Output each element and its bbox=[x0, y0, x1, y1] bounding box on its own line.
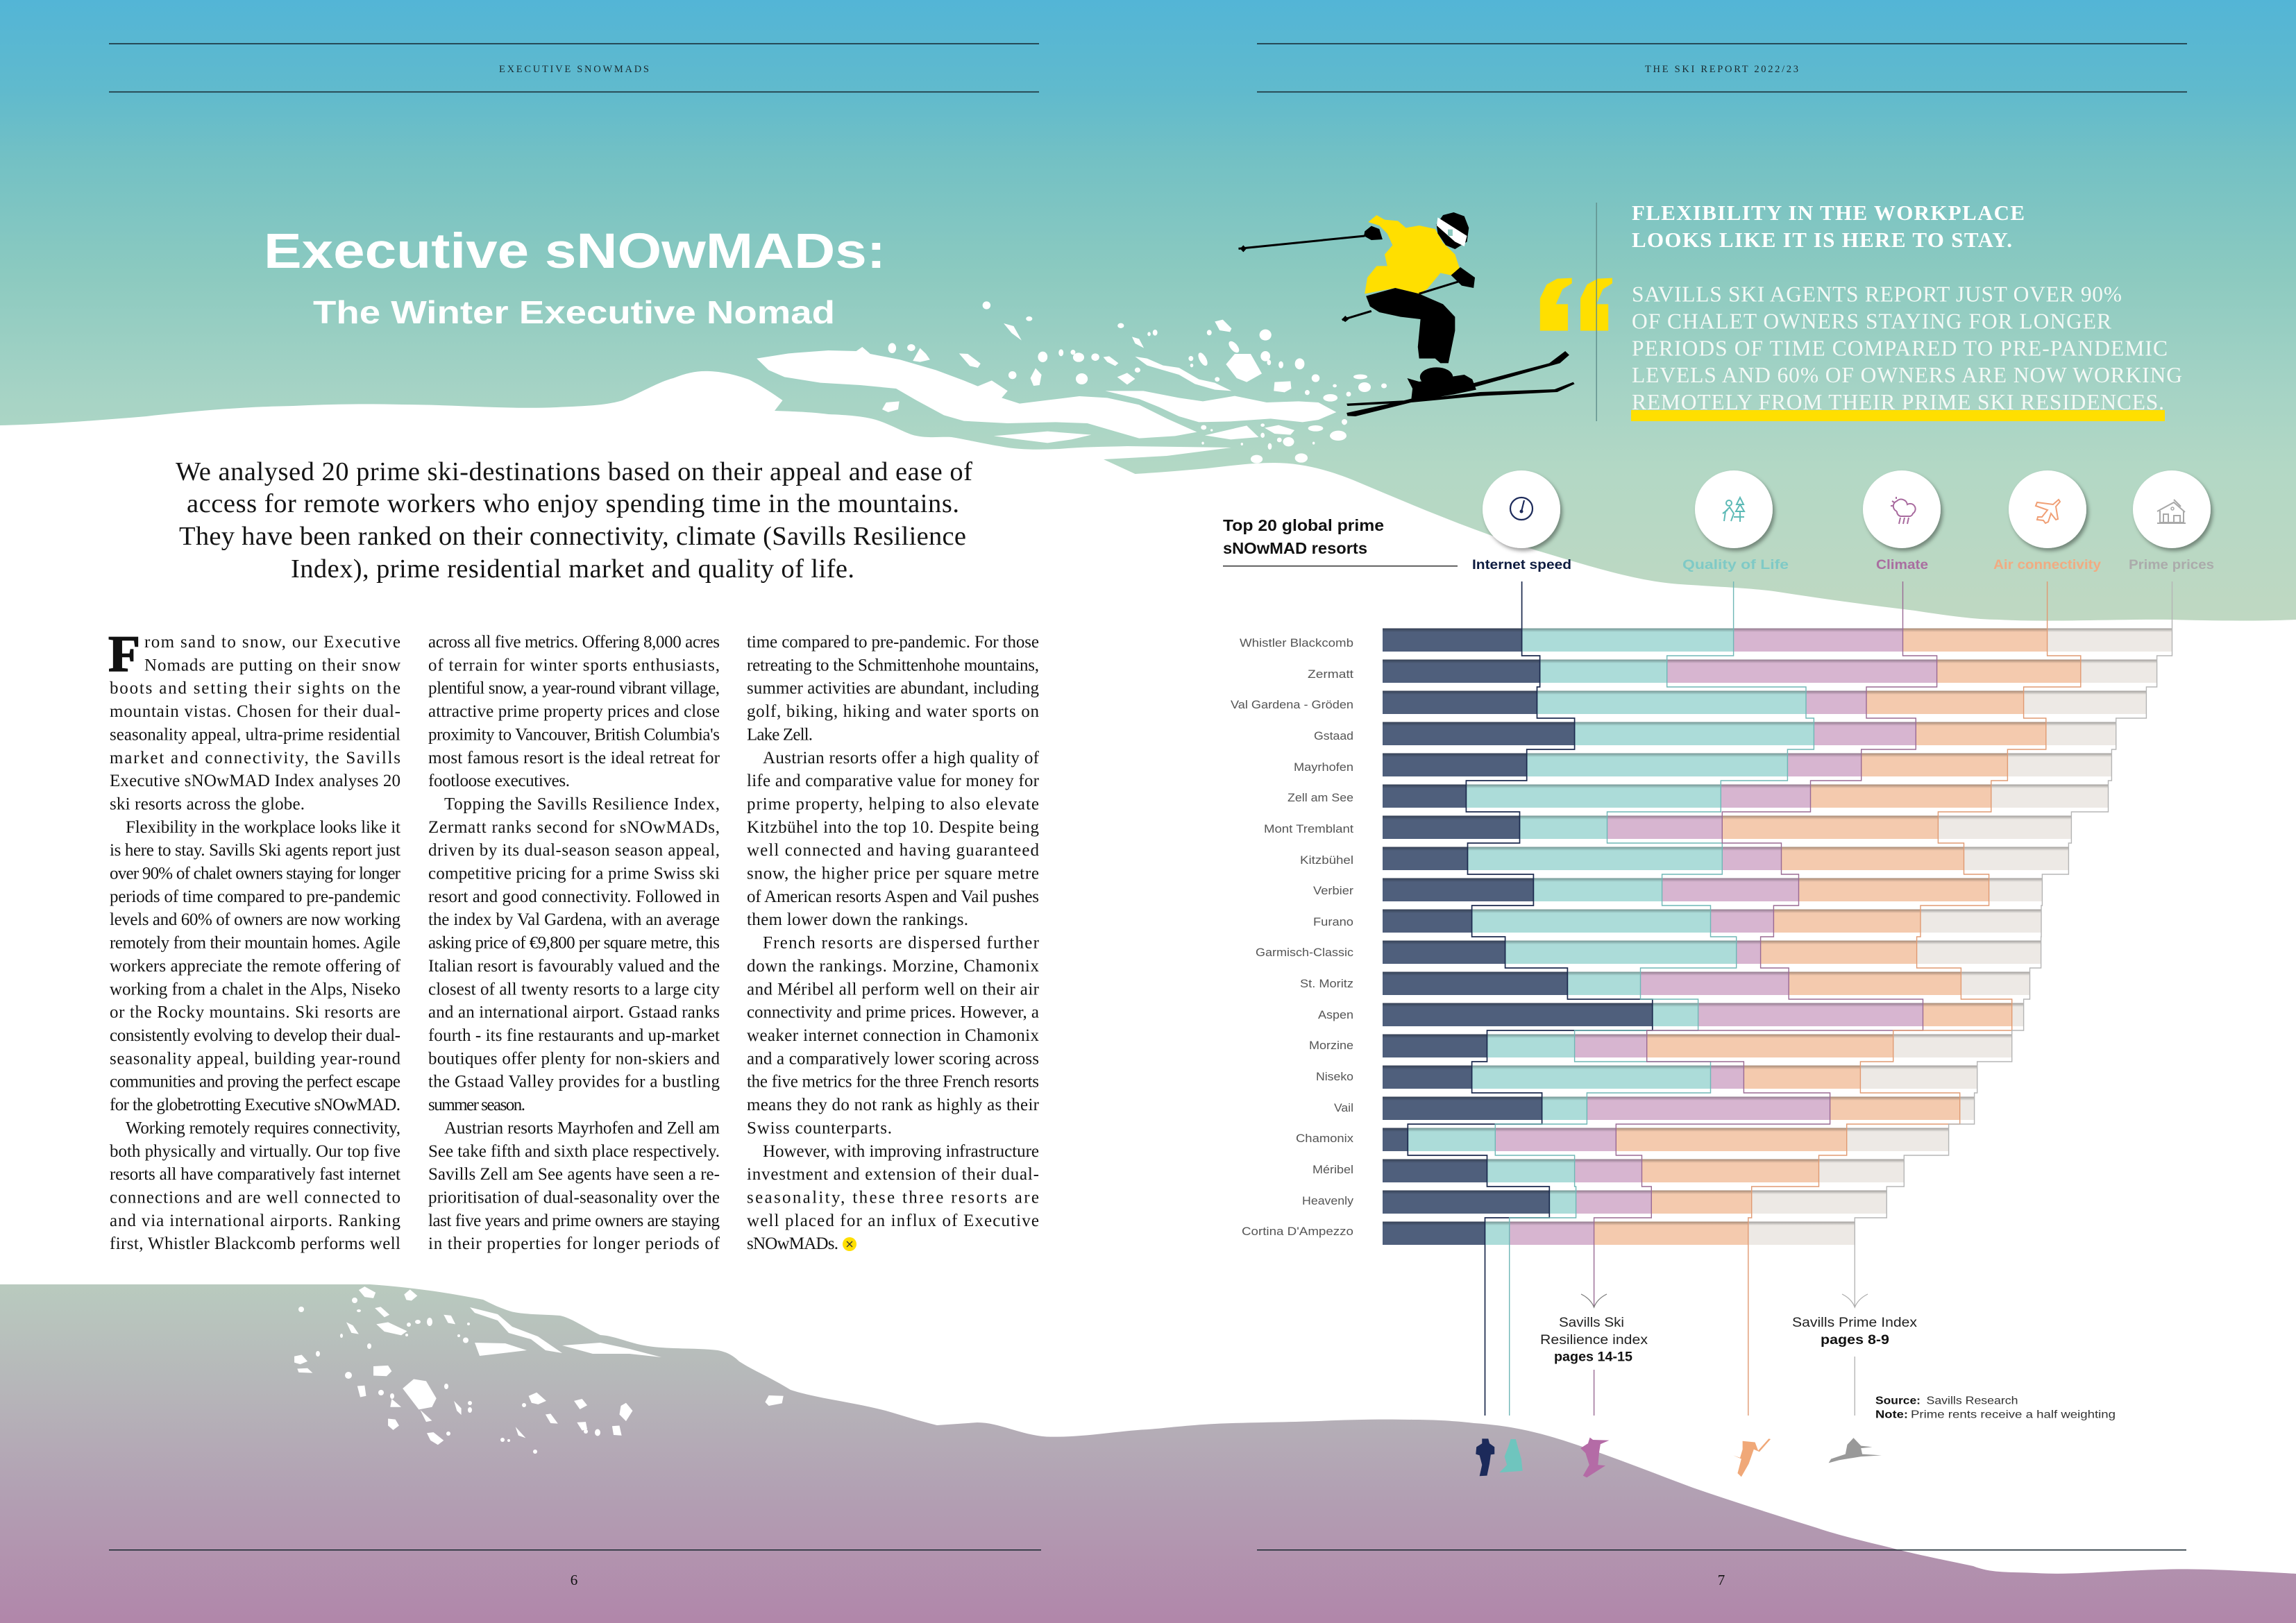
body text column 3: time compared to pre-pandemic. For those bbox=[747, 633, 1039, 652]
body text column 2: competitive pricing for a prime Swiss ski bbox=[428, 865, 720, 883]
body text column 2: last five years and prime owners are staying bbox=[428, 1212, 720, 1230]
body text column 2: and an international airport. Gstaad ranks bbox=[428, 1003, 720, 1022]
gloves bbox=[1364, 226, 1475, 288]
row: Chamonix: Chamonix bbox=[1296, 1132, 1354, 1145]
skis bbox=[1347, 351, 1575, 416]
body text column 1: communities and proving the perfect escape bbox=[110, 1073, 400, 1091]
snow spray streaks top bbox=[757, 301, 1351, 464]
icon: teal skier bbox=[1499, 1439, 1523, 1472]
body text column 2: boutiques offer plenty for non-skiers and bbox=[428, 1049, 720, 1068]
row: Aspen: Aspen bbox=[1318, 1008, 1353, 1021]
note: Savills Prime Index: pages 8-9 bbox=[1821, 1333, 1889, 1348]
row: Val Gardena - Gröden: Val Gardena - Gröden bbox=[1231, 698, 1353, 711]
icon: navy skier bbox=[1476, 1438, 1494, 1476]
body text column 1: Executive sNOwMAD Index analyses 20 bbox=[110, 772, 400, 790]
quote body: LEVELS AND 60% OF OWNERS ARE NOW WORKING bbox=[1632, 363, 2182, 387]
body text column 1: working from a chalet in the Alps, Niseko bbox=[110, 980, 400, 999]
body text column 2: See take fifth and sixth place respectively. bbox=[428, 1142, 720, 1161]
body text column 2: attractive prime property prices and close bbox=[428, 702, 720, 721]
note: Savills Ski Resilience index: pages 14-15 bbox=[1554, 1350, 1632, 1364]
source note bbox=[1875, 1395, 2116, 1421]
body text column 1: workers appreciate the remote offering of bbox=[110, 957, 401, 976]
note: Savills Prime Index bbox=[1792, 1316, 1918, 1348]
stepped line: quality of life bbox=[1495, 581, 1814, 1416]
white snow field bbox=[0, 371, 2296, 1574]
body text column 1: remotely from their mountain homes. Agile bbox=[110, 934, 400, 953]
quote divider bbox=[1596, 203, 1597, 421]
quote heading: LOOKS LIKE IT IS HERE TO STAY. bbox=[1632, 228, 2012, 252]
body text column 3: of American resorts Aspen and Vail pushes bbox=[747, 887, 1039, 906]
row: Kitzbühel bbox=[1300, 847, 2068, 870]
helmet bbox=[1437, 212, 1469, 249]
body text column 3: the five metrics for the three French resorts bbox=[747, 1073, 1039, 1091]
body text column 3: life and comparative value for money for bbox=[747, 772, 1040, 790]
intro paragraph: access for remote workers who enjoy spending time in the mountains. bbox=[187, 489, 959, 518]
row: St. Moritz bbox=[1300, 971, 2029, 995]
body text column 3: However, with improving infrastructure bbox=[763, 1142, 1039, 1161]
row: Zell am See bbox=[1288, 784, 2109, 808]
footer left: 6 bbox=[571, 1572, 577, 1588]
metric: internet speed: Internet speed bbox=[1472, 558, 1571, 572]
quote marks bbox=[1540, 278, 1612, 331]
metric: prime prices bbox=[2129, 470, 2214, 572]
body text column 3: snow, the higher price per square metre bbox=[747, 865, 1039, 883]
row: Morzine bbox=[1309, 1034, 2012, 1057]
row: Mont Tremblant bbox=[1264, 816, 2071, 839]
row: Whistler Blackcomb bbox=[1240, 629, 2172, 652]
body text column 1: Nomads are putting on their snow bbox=[144, 656, 400, 674]
row: Méribel: Méribel bbox=[1312, 1163, 1353, 1176]
body text column 1: market and connectivity, the Savills bbox=[110, 749, 400, 767]
body text column 1: over 90% of chalet owners staying for longer bbox=[110, 865, 401, 883]
row: Méribel bbox=[1312, 1159, 1904, 1182]
body text column 1: for the globetrotting Executive sNOwMAD. bbox=[110, 1096, 400, 1114]
body text column 1: ski resorts across the globe. bbox=[110, 795, 305, 813]
body text column 1: connections and are well connected to bbox=[110, 1188, 400, 1207]
metric: prime prices: Prime prices bbox=[2129, 558, 2214, 572]
body text column 2: prioritisation of dual-seasonality over the bbox=[428, 1188, 720, 1207]
stepped line: air connectivity bbox=[1748, 581, 2081, 1416]
body text column 3: prime property, helping to also elevate bbox=[747, 795, 1039, 813]
note: Savills Ski Resilience index: Resilience index bbox=[1540, 1333, 1648, 1348]
row: Niseko: Niseko bbox=[1316, 1070, 1353, 1083]
chart heading bbox=[1223, 516, 1458, 566]
body text column 3: connectivity and prime prices. However, a bbox=[747, 1003, 1039, 1022]
body text column 2: in their properties for longer periods of bbox=[428, 1234, 720, 1253]
body text column 1: or the Rocky mountains. Ski resorts are bbox=[110, 1003, 400, 1022]
body text column 1 bbox=[110, 633, 401, 1253]
row: Niseko bbox=[1316, 1066, 1977, 1089]
body text column 3: and a comparatively lower scoring across bbox=[747, 1049, 1039, 1068]
icon: orange skier bbox=[1733, 1438, 1771, 1477]
body text column 3: down the rankings. Morzine, Chamonix bbox=[747, 957, 1040, 976]
source note: Prime rents receive a half weighting bbox=[1911, 1409, 2116, 1421]
source note: Savills Research bbox=[1927, 1395, 2018, 1407]
quote body bbox=[1632, 282, 2182, 414]
body text column 2: the Gstaad Valley provides for a bustling bbox=[428, 1073, 720, 1091]
metric: climate: Climate bbox=[1876, 558, 1928, 572]
row: Verbier bbox=[1313, 878, 2042, 901]
row: Whistler Blackcomb: Whistler Blackcomb bbox=[1240, 636, 1353, 649]
body text column 3: retreating to the Schmittenhohe mountains, bbox=[747, 656, 1039, 674]
body text column 3: Austrian resorts offer a high quality of bbox=[763, 749, 1040, 767]
body text column 1: Flexibility in the workplace looks like it bbox=[126, 818, 400, 837]
body text column 2: most famous resort is the ideal retreat for bbox=[428, 749, 720, 767]
chart heading: Top 20 global prime bbox=[1223, 516, 1384, 534]
header right bbox=[1257, 44, 2187, 92]
row: Chamonix bbox=[1296, 1128, 1949, 1151]
body text column 2: Savills Zell am See agents have seen a re- bbox=[428, 1165, 720, 1184]
row: Cortina D'Ampezzo bbox=[1242, 1221, 1855, 1245]
body text column 3: Kitzbühel into the top 10. Despite being bbox=[747, 818, 1040, 837]
row: Zermatt: Zermatt bbox=[1308, 668, 1353, 681]
intro paragraph bbox=[176, 457, 972, 584]
quote highlight bar bbox=[1631, 410, 2165, 421]
basket marks bbox=[1240, 245, 1349, 322]
body text column 2: the index by Val Gardena, with an average bbox=[428, 910, 720, 929]
body text column 2: Topping the Savills Resilience Index, bbox=[444, 795, 720, 813]
body text column 1: Working remotely requires connectivity, bbox=[126, 1119, 400, 1137]
body text column 3 bbox=[747, 633, 1040, 1253]
icon: grey skier bbox=[1829, 1438, 1882, 1463]
body text column 1: rom sand to snow, our Executive bbox=[144, 633, 400, 652]
body text column 2: Zermatt ranks second for sNOwMADs, bbox=[428, 818, 720, 837]
body text column 2: driven by its dual-season season appeal, bbox=[428, 841, 720, 860]
body text column 2 bbox=[428, 633, 720, 1253]
body text column 3: weaker internet connection in Chamonix bbox=[747, 1026, 1040, 1045]
row: Kitzbühel: Kitzbühel bbox=[1300, 853, 1353, 867]
row: Vail: Vail bbox=[1334, 1101, 1353, 1114]
body text column 3: investment and extension of their dual- bbox=[747, 1165, 1039, 1184]
body text column 3: them lower down the rankings. bbox=[747, 910, 968, 929]
metric: air connectivity: Air connectivity bbox=[1993, 558, 2101, 572]
poles bbox=[1238, 236, 1460, 320]
metric: air connectivity bbox=[1993, 470, 2101, 572]
row: Garmisch-Classic bbox=[1256, 941, 2041, 964]
row: Furano: Furano bbox=[1313, 915, 1353, 928]
body text column 3: and Méribel all perform well on their air bbox=[747, 980, 1040, 999]
footer right: 7 bbox=[1718, 1572, 1725, 1588]
boots bbox=[1420, 367, 1453, 386]
body text column 1: consistently evolving to develop their dual- bbox=[110, 1026, 400, 1045]
body text column 1: is here to stay. Savills Ski agents report just bbox=[110, 841, 400, 860]
header right: THE SKI REPORT 2022/23 bbox=[1645, 64, 1798, 75]
body text column 2: footloose executives. bbox=[428, 772, 570, 790]
body text column 2: fourth - its fine restaurants and up-market bbox=[428, 1026, 720, 1045]
icon: purple skier bbox=[1580, 1438, 1609, 1477]
row: Mont Tremblant: Mont Tremblant bbox=[1264, 822, 1353, 835]
metric: climate bbox=[1863, 470, 1941, 572]
drop cap: F bbox=[108, 626, 140, 683]
row: Mayrhofen bbox=[1294, 754, 2111, 776]
row: Garmisch-Classic: Garmisch-Classic bbox=[1256, 946, 1354, 959]
body text column 1: first, Whistler Blackcomb performs well bbox=[110, 1234, 400, 1253]
small skier figures bbox=[1476, 1438, 1882, 1477]
note: Savills Ski Resilience index: Savills Ski bbox=[1559, 1316, 1624, 1330]
body text column 3: golf, biking, hiking and water sports on bbox=[747, 702, 1040, 721]
title: Executive sNOwMADs: bbox=[264, 224, 886, 279]
body text column 2: closest of all twenty resorts to a large city bbox=[428, 980, 720, 999]
body text column 2: summer season. bbox=[428, 1096, 525, 1114]
row: Verbier: Verbier bbox=[1313, 884, 1353, 897]
arrow: resilience index bbox=[1581, 1294, 1607, 1307]
quote body: REMOTELY FROM THEIR PRIME SKI RESIDENCES. bbox=[1632, 390, 2164, 414]
quote heading bbox=[1632, 201, 2025, 252]
row: Cortina D'Ampezzo: Cortina D'Ampezzo bbox=[1242, 1225, 1353, 1238]
arrow: prime index bbox=[1842, 1294, 1868, 1307]
body text column 2: Italian resort is favourably valued and the bbox=[428, 957, 720, 976]
snow spray near skier bbox=[1330, 375, 1387, 441]
metric: quality of life: Quality of Life bbox=[1682, 558, 1789, 572]
row: Morzine: Morzine bbox=[1309, 1039, 1353, 1052]
body text column 2: asking price of €9,800 per square metre, this bbox=[428, 934, 720, 953]
body text column 3: means they do not rank as highly as their bbox=[747, 1096, 1040, 1114]
row: Aspen bbox=[1318, 1003, 2024, 1026]
row: Val Gardena - Gröden bbox=[1231, 691, 2146, 714]
row: Zermatt bbox=[1308, 659, 2157, 683]
header left bbox=[109, 44, 1039, 92]
quote body: OF CHALET OWNERS STAYING FOR LONGER bbox=[1632, 309, 2111, 333]
body text column 3: French resorts are dispersed further bbox=[763, 934, 1040, 953]
body text column 2: Austrian resorts Mayrhofen and Zell am bbox=[444, 1119, 720, 1137]
body text column 1: and via international airports. Ranking bbox=[110, 1212, 401, 1230]
quote body: SAVILLS SKI AGENTS REPORT JUST OVER 90% bbox=[1632, 282, 2122, 307]
stepped line: climate bbox=[1594, 581, 1937, 1416]
row: Zell am See: Zell am See bbox=[1288, 791, 1353, 804]
goggles bbox=[1437, 217, 1467, 246]
body text column 3: well placed for an influx of Executive bbox=[747, 1212, 1039, 1230]
body text column 2: of terrain for winter sports enthusiasts, bbox=[428, 656, 720, 674]
intro paragraph: Index), prime residential market and quality of life. bbox=[291, 554, 854, 584]
body text column 3: well connected and having guaranteed bbox=[747, 841, 1040, 860]
quote heading: FLEXIBILITY IN THE WORKPLACE bbox=[1632, 201, 2025, 225]
subtitle: The Winter Executive Nomad bbox=[313, 294, 835, 330]
body text column 2: across all five metrics. Offering 8,000 acres bbox=[428, 633, 720, 652]
body text column 1: mountain vistas. Chosen for their dual- bbox=[110, 702, 400, 721]
row: Gstaad bbox=[1314, 722, 2116, 745]
row: Gstaad: Gstaad bbox=[1314, 729, 1353, 742]
trousers bbox=[1366, 288, 1455, 368]
body text column 2: resort and good connectivity. Followed in bbox=[428, 887, 720, 906]
header left: EXECUTIVE SNOWMADS bbox=[499, 64, 649, 75]
body text column 2: proximity to Vancouver, British Columbia's bbox=[428, 725, 720, 744]
row: Furano bbox=[1313, 909, 2041, 933]
source note: Note: bbox=[1875, 1409, 1908, 1421]
row: Vail bbox=[1334, 1096, 1975, 1120]
snow spray bottom left bbox=[294, 1286, 784, 1454]
row: Heavenly: Heavenly bbox=[1302, 1194, 1354, 1207]
stacked bar chart bbox=[1231, 629, 2172, 1245]
icon: end mark bbox=[843, 1237, 856, 1251]
body text column 1: seasonality appeal, building year-round bbox=[110, 1049, 401, 1068]
body text column 3: Lake Zell. bbox=[747, 725, 813, 744]
metric: internet speed bbox=[1472, 470, 1571, 572]
body text column 1: both physically and virtually. Our top five bbox=[110, 1142, 400, 1161]
skier illustration bbox=[1238, 212, 1575, 416]
goggle lens bbox=[1448, 230, 1453, 236]
body text column 3: seasonality, these three resorts are bbox=[747, 1188, 1039, 1207]
body text column 3: sNOwMADs. bbox=[747, 1234, 838, 1253]
body text column 1: periods of time compared to pre-pandemic bbox=[110, 887, 400, 906]
body text column 1: levels and 60% of owners are now working bbox=[110, 910, 401, 929]
body text column 2: plentiful snow, a year-round vibrant village, bbox=[428, 679, 720, 698]
stepped line: prime prices bbox=[1855, 581, 2172, 1416]
stepped line: internet speed bbox=[1408, 581, 1653, 1416]
row: Mayrhofen: Mayrhofen bbox=[1294, 760, 1353, 774]
row: Heavenly bbox=[1302, 1191, 1886, 1214]
jacket bbox=[1365, 215, 1460, 294]
metric: quality of life bbox=[1682, 470, 1789, 572]
intro paragraph: They have been ranked on their connectivity, climate (Savills Resilience bbox=[179, 522, 966, 551]
intro paragraph: We analysed 20 prime ski-destinations based on their appeal and ease of bbox=[176, 457, 972, 486]
source note: Source: bbox=[1875, 1395, 1921, 1407]
body text column 3: Swiss counterparts. bbox=[747, 1119, 892, 1137]
chart heading: sNOwMAD resorts bbox=[1223, 539, 1367, 557]
quote body: PERIODS OF TIME COMPARED TO PRE-PANDEMIC bbox=[1632, 336, 2168, 361]
note: Savills Ski Resilience index bbox=[1540, 1316, 1648, 1364]
body text column 1: boots and setting their sights on the bbox=[110, 679, 400, 698]
body text column 1: resorts all have comparatively fast internet bbox=[110, 1165, 400, 1184]
body text column 1: seasonality appeal, ultra-prime residential bbox=[110, 725, 400, 744]
row: St. Moritz: St. Moritz bbox=[1300, 977, 1353, 990]
body text column 3: summer activities are abundant, including bbox=[747, 679, 1040, 698]
note: Savills Prime Index: Savills Prime Index bbox=[1792, 1316, 1918, 1330]
